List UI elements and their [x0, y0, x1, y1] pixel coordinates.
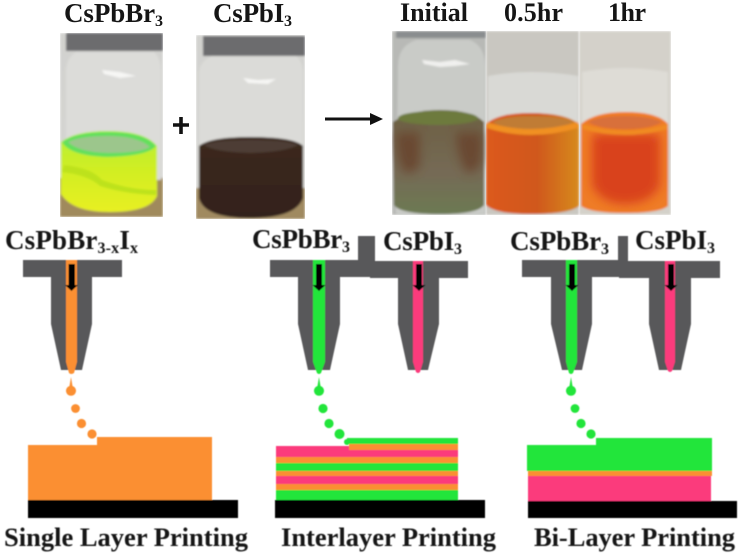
- dual nozzles: [270, 236, 468, 370]
- label: CsPbI3: CsPbI: [635, 225, 707, 255]
- ink channel: green: [566, 260, 577, 374]
- label: CsPbI3: 3: [707, 240, 715, 257]
- label: CsPbI3: CsPbI: [383, 226, 454, 256]
- nozzle: [23, 260, 122, 370]
- caption: Bi-Layer Printing: [534, 522, 735, 552]
- flow arrow: [65, 264, 78, 291]
- substrate: [275, 500, 485, 518]
- substrate: [28, 500, 238, 518]
- label: CsPbBr3: CsPbBr: [510, 226, 601, 256]
- photo: Initial vial: [392, 31, 486, 215]
- heading: CsPbBr3: 3: [155, 13, 163, 30]
- label: CsPbBr3-xIx: I: [119, 225, 130, 255]
- label: CsPbBr3: 3: [601, 241, 609, 258]
- heading: CsPbI3: 3: [284, 13, 292, 30]
- panel: interlayer printing: [252, 224, 496, 552]
- droplets: [566, 377, 596, 439]
- label: CsPbI3: 3: [454, 241, 462, 258]
- label: CsPbBr3-xIx: 3-x: [98, 240, 119, 257]
- photo: 0.5hr vial: [486, 31, 579, 215]
- dual nozzles: [522, 236, 720, 370]
- panel: single layer printing: [4, 225, 248, 552]
- label: CsPbBr3: 3: [342, 239, 350, 256]
- label: CsPbBr3-xIx: CsPbBr: [5, 225, 97, 255]
- label: CsPbBr3: CsPbBr: [252, 224, 342, 254]
- arrow: mixing reaction: [325, 113, 383, 125]
- flow arrows: [566, 264, 678, 291]
- printed bi-layer: [527, 438, 712, 501]
- icon: plus sign: [173, 117, 189, 134]
- panel: bi-layer printing: [510, 225, 737, 552]
- droplets: [66, 377, 97, 439]
- photo: 1hr vial: [579, 31, 671, 215]
- flow arrows: [312, 264, 426, 291]
- droplets: [314, 377, 350, 445]
- ink channel: pink: [665, 261, 675, 372]
- printed layer: [28, 437, 212, 500]
- ink channel: green: [313, 260, 325, 374]
- substrate: [528, 501, 737, 518]
- photo: CsPbBr3 vial: [60, 33, 163, 217]
- caption: Interlayer Printing: [281, 522, 496, 552]
- printed stack: [276, 438, 458, 500]
- ink channel: [66, 260, 77, 374]
- caption: Single Layer Printing: [4, 522, 248, 552]
- photo: CsPbI3 vial: [196, 35, 305, 219]
- label: CsPbBr3-xIx: x: [130, 240, 138, 257]
- ink channel: pink: [413, 261, 423, 373]
